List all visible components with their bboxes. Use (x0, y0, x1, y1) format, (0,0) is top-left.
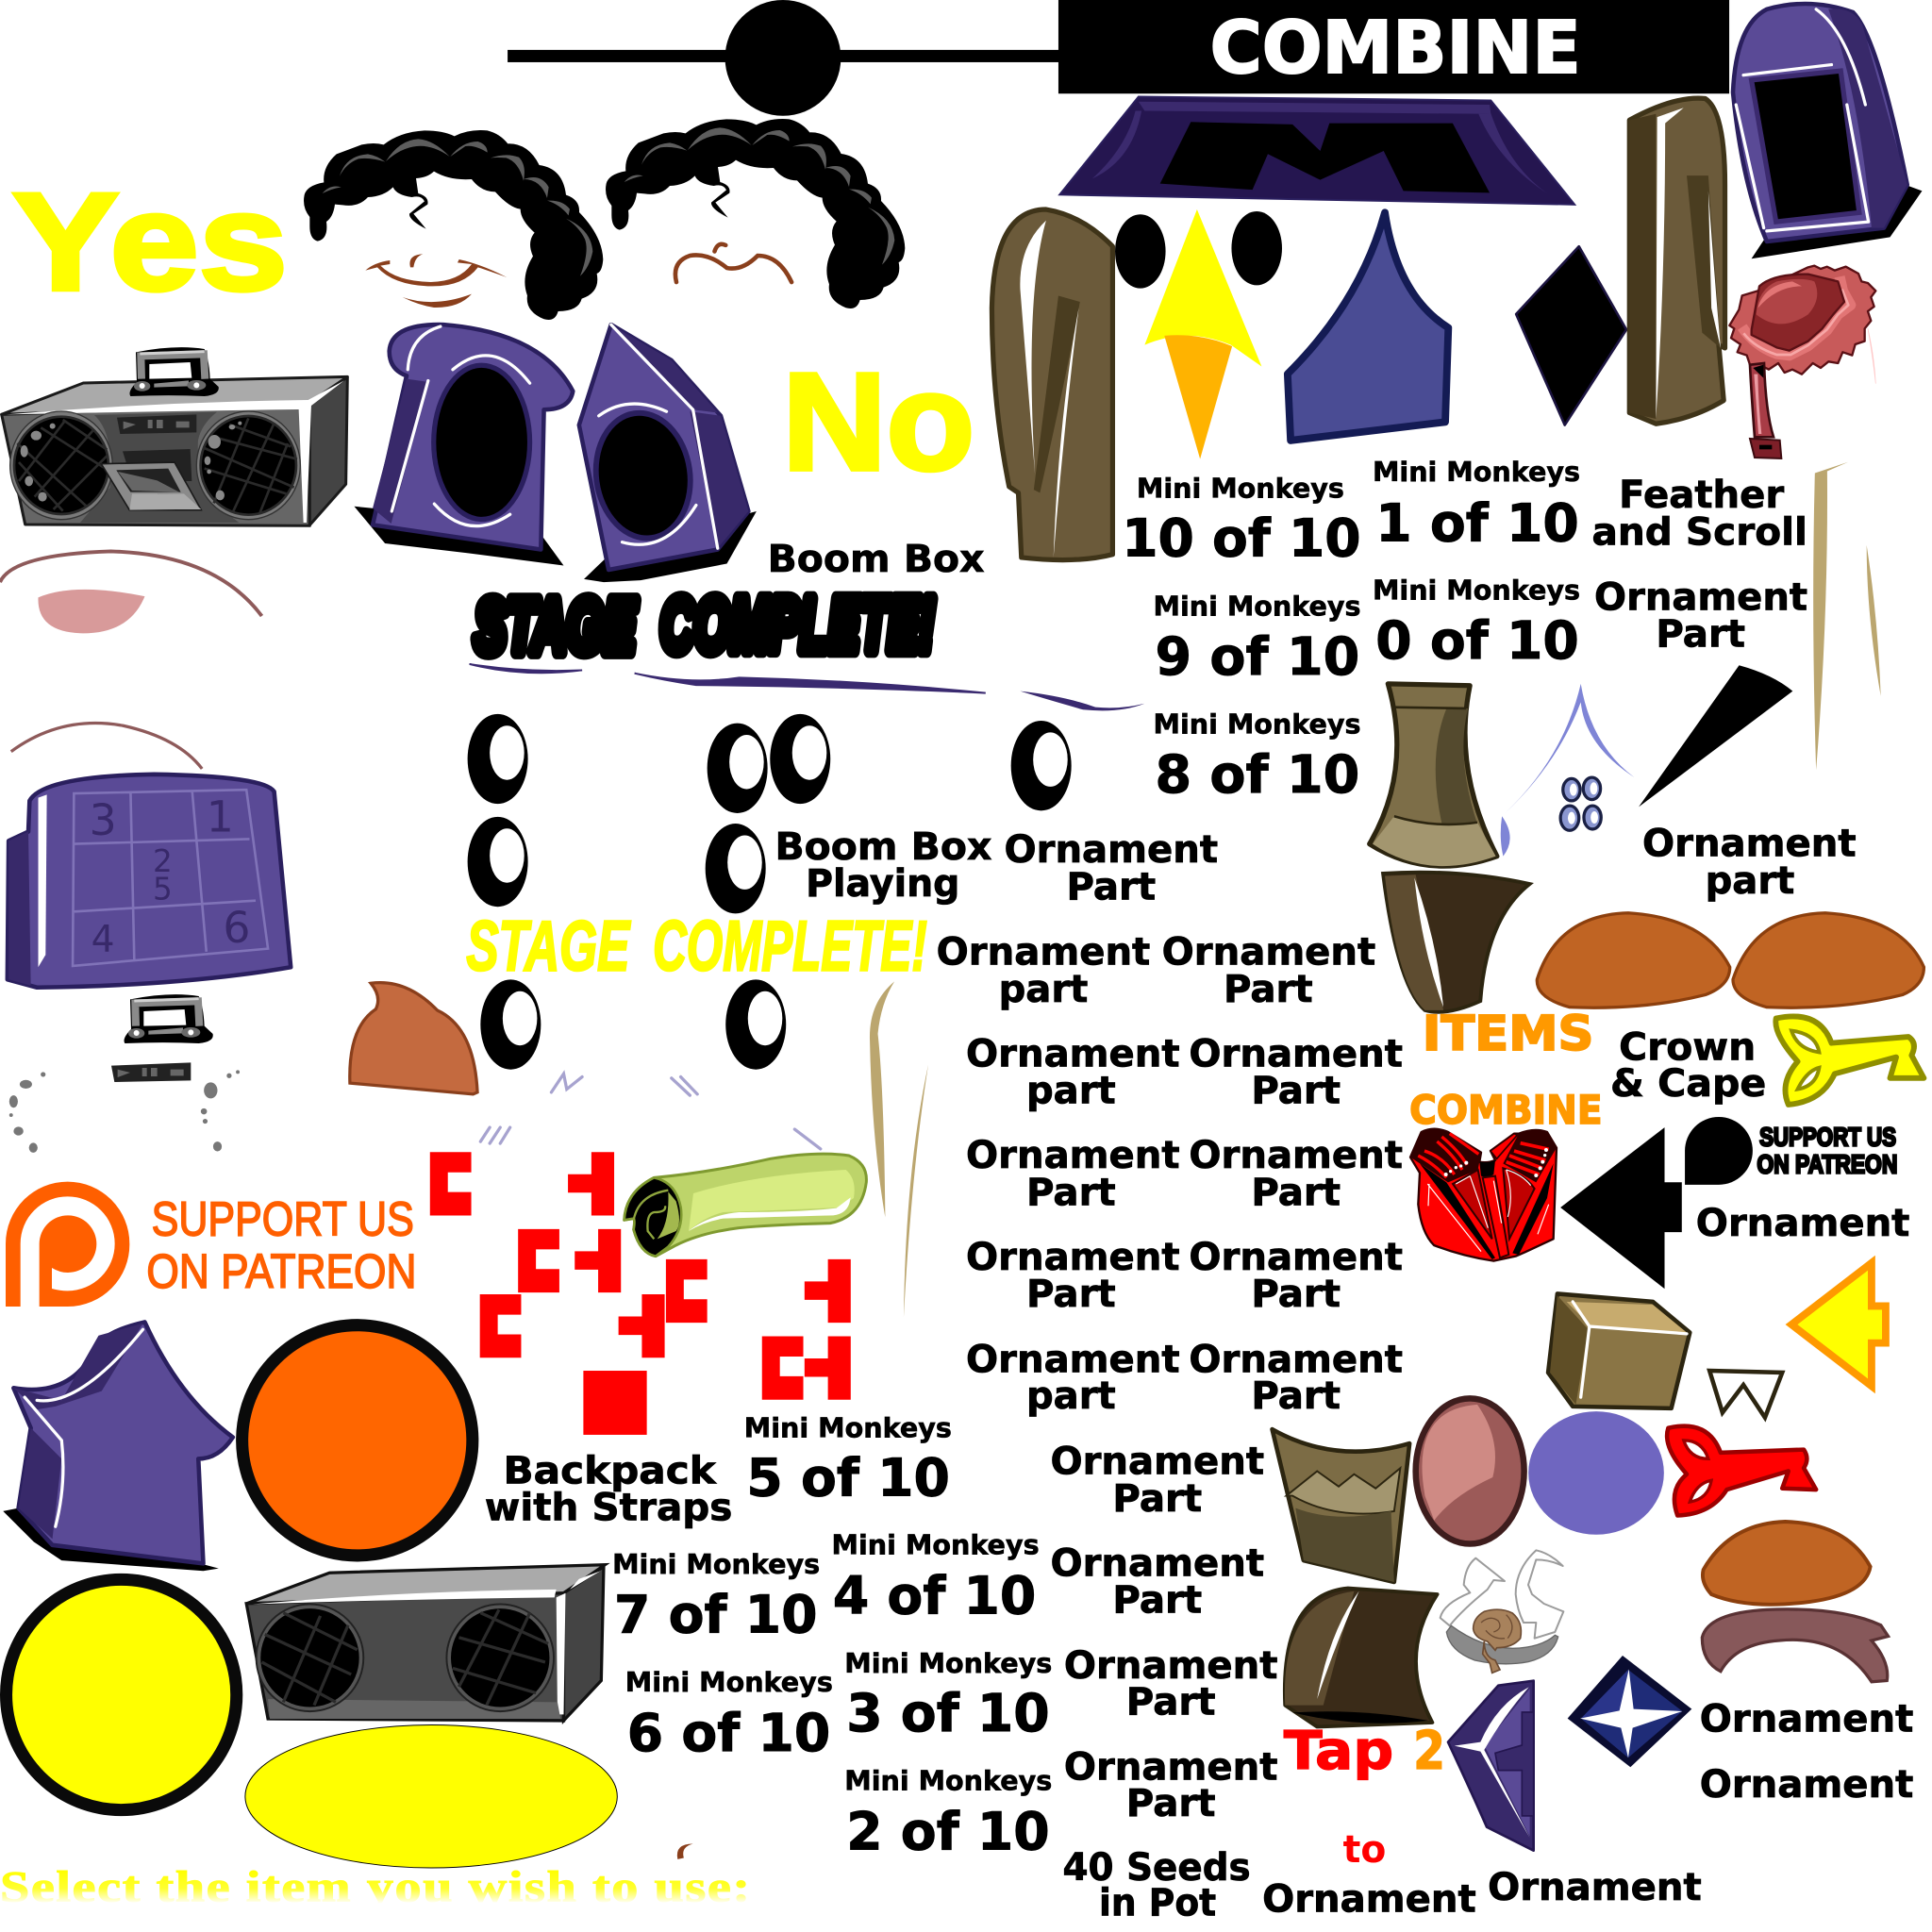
stage complete yellow title: COMPLETE! (653, 906, 927, 985)
ornament caption: Ornament (1696, 1200, 1909, 1245)
mini monkeys 0 of 10: 0 of 10 (1375, 610, 1579, 671)
mini monkeys 4 of 10: Mini Monkeys (832, 1530, 1040, 1561)
purple tablet: 5 (153, 871, 173, 907)
slider line with knob (508, 0, 1179, 116)
items heading: ITEMS (1423, 1007, 1593, 1062)
blue beads (1560, 777, 1601, 830)
quadrant: top-left sprites (0, 0, 1179, 988)
no label: No (782, 345, 974, 500)
w teeth (1709, 1371, 1782, 1418)
blue tent shape (1288, 212, 1448, 441)
ornament part row 4 (966, 1336, 1403, 1418)
dark brown cuff (1285, 1589, 1438, 1726)
eye (1011, 721, 1072, 810)
purple tablet: 4 (92, 919, 115, 961)
ornament part row 2 (966, 1132, 1403, 1214)
mini monkeys 8 of 10: Mini Monkeys (1154, 709, 1361, 741)
ornament part row 4: Ornament (966, 1336, 1180, 1381)
ornament part row 4: part (1026, 1373, 1116, 1418)
sad mouth (675, 244, 791, 282)
dark purple hood (1059, 97, 1574, 205)
feather hat with strap (1729, 266, 1875, 458)
ornament captions bottom: Ornament (1262, 1875, 1476, 1921)
mini monkeys 7 of 10: Mini Monkeys (612, 1549, 820, 1580)
combine orange heading: COMBINE (1409, 1087, 1603, 1133)
mini monkeys 9 of 10: Mini Monkeys (1154, 591, 1361, 622)
select item prompt: Select the item you wish to use: (0, 1862, 752, 1911)
ornament part row 3: Ornament (1189, 1234, 1403, 1279)
ornament part caption: Ornament (1642, 821, 1857, 866)
speaker left (354, 325, 573, 565)
stage complete yellow title: STAGE (466, 906, 631, 985)
orange circle (242, 1325, 473, 1556)
mini monkeys 4 of 10 (832, 1530, 1040, 1625)
pink egg (1416, 1398, 1524, 1544)
ornament part cup (1273, 1429, 1409, 1582)
ornament part caption: Ornament (1162, 929, 1375, 974)
mini monkeys 3 of 10: 3 of 10 (846, 1683, 1050, 1743)
patreon logo (6, 1182, 129, 1307)
purple swooshes (470, 664, 986, 693)
grey speaker dots (9, 1070, 240, 1153)
ornament part captions column: Ornament (1050, 1540, 1264, 1585)
ornament captions right (1700, 1696, 1913, 1807)
purple swoosh (1020, 691, 1144, 710)
ornament part captions column: Part (1112, 1475, 1202, 1521)
support us on patreon (146, 1191, 416, 1298)
eye (725, 979, 786, 1070)
mini monkeys 5 of 10: 5 of 10 (746, 1448, 950, 1508)
tan strips (870, 981, 928, 1317)
mini monkeys 10 of 10: Mini Monkeys (1137, 474, 1344, 505)
ornament part row 1: part (1026, 1068, 1116, 1113)
ornament captions bottom: Ornament (1488, 1864, 1702, 1909)
periwinkle scratches (480, 1074, 821, 1149)
backpack caption: with Straps (485, 1485, 732, 1530)
small control strip (111, 1062, 191, 1082)
ornament part caption (1162, 929, 1375, 1011)
support us on patreon: SUPPORT US (152, 1191, 414, 1245)
maroon arc (1702, 1609, 1889, 1682)
speaker right (579, 325, 757, 582)
ornament part caption (1004, 826, 1218, 908)
ornament part caption (1642, 821, 1857, 903)
eyes row (468, 714, 830, 913)
yellow circle (7, 1579, 237, 1810)
dark brown cuff (1383, 873, 1529, 1012)
mini monkeys 8 of 10: 8 of 10 (1155, 744, 1359, 805)
ornament part captions column: Part (1126, 1678, 1215, 1724)
yellow arrow cone (1144, 209, 1261, 458)
olive cloth left (991, 209, 1112, 560)
mini monkeys 7 of 10 (612, 1549, 820, 1645)
boom box caption: Boom Box (768, 536, 984, 581)
ornament part caption: Part (1656, 611, 1745, 657)
orange bun left (1537, 913, 1730, 1008)
ornament part captions column (1050, 1439, 1277, 1825)
backpack caption (485, 1448, 732, 1530)
ornament part captions column: Ornament (1050, 1439, 1264, 1484)
feather and scroll caption: and Scroll (1591, 508, 1807, 554)
purple tablet: 6 (223, 903, 250, 953)
purple tablet: 1 (207, 792, 234, 842)
ornament captions bottom (1262, 1864, 1702, 1921)
tap 2 to: to (1343, 1826, 1386, 1872)
mini monkeys 5 of 10 (744, 1413, 952, 1508)
mini monkeys 0 of 10: Mini Monkeys (1373, 575, 1580, 606)
tap 2 to (1284, 1721, 1445, 1872)
40 seeds caption (1063, 1844, 1251, 1924)
mini monkeys 1 of 10: 1 of 10 (1375, 492, 1579, 553)
stage complete black title: STAGE (475, 584, 638, 668)
ornament captions right: Ornament (1700, 1696, 1913, 1741)
eye (480, 979, 541, 1070)
mini monkeys 9 of 10 (1154, 591, 1361, 687)
mini monkeys 3 of 10: Mini Monkeys (844, 1648, 1052, 1679)
mini monkeys 5 of 10: Mini Monkeys (744, 1413, 952, 1444)
ornament part row 3: Ornament (966, 1234, 1180, 1279)
mini monkeys 10 of 10: 10 of 10 (1122, 508, 1361, 569)
ornament part caption (937, 929, 1150, 1011)
crown and cape caption (1610, 1024, 1766, 1106)
happy face (365, 254, 507, 308)
ornament captions right: Ornament (1700, 1761, 1913, 1807)
arc (11, 724, 202, 769)
ornament part captions column: Part (1126, 1780, 1215, 1825)
stage complete yellow title (466, 906, 927, 985)
backpack caption: Backpack (504, 1448, 717, 1493)
ornament part row 3: Part (1251, 1271, 1341, 1316)
purple gem (1448, 1681, 1534, 1851)
star diamond (1568, 1656, 1691, 1767)
small brown hook (677, 1844, 693, 1859)
ornament part caption: Part (1224, 966, 1313, 1011)
ornament part row 1: Part (1251, 1068, 1341, 1113)
boom box playing caption (774, 824, 991, 906)
mouth arc and tongue (0, 551, 262, 633)
black spike (1639, 665, 1792, 807)
sad hair (606, 119, 905, 308)
yellow arrow (1791, 1263, 1886, 1386)
crown and cape caption: Crown (1619, 1024, 1756, 1069)
red pixel brackets (430, 1152, 851, 1435)
red key (1667, 1426, 1816, 1515)
orange bun (1703, 1522, 1871, 1605)
support us on patreon: ON PATREON (146, 1244, 416, 1298)
happy hair (304, 130, 603, 320)
mini monkeys 0 of 10 (1373, 575, 1580, 671)
ornament part row 1: Ornament (1189, 1030, 1403, 1075)
ornament part row 1 (966, 1030, 1403, 1113)
tap 2 to: 2 (1413, 1721, 1445, 1782)
feather and scroll caption (1591, 472, 1807, 554)
small support us black text (1757, 1123, 1897, 1178)
mini monkeys 8 of 10 (1154, 709, 1361, 805)
ornament part captions column: Ornament (1064, 1642, 1277, 1688)
olive cloth right (1629, 98, 1724, 424)
mini monkeys 3 of 10 (844, 1648, 1052, 1743)
mini monkeys 2 of 10: 2 of 10 (846, 1801, 1050, 1861)
seeds in pot (1441, 1550, 1563, 1673)
mini monkeys 9 of 10: 9 of 10 (1155, 626, 1359, 687)
black patreon mark (1685, 1117, 1753, 1185)
small support us black text: SUPPORT US (1759, 1123, 1896, 1152)
black arrow (1560, 1127, 1682, 1289)
ornament part row 1: Ornament (966, 1030, 1180, 1075)
40 seeds caption: 40 Seeds (1063, 1844, 1251, 1890)
purple tablet: 3 (90, 795, 117, 845)
crown and cape caption: & Cape (1610, 1060, 1766, 1106)
mini monkeys 1 of 10 (1373, 457, 1580, 553)
purple tablet (8, 774, 291, 988)
purple tablet: 2 (153, 843, 173, 879)
mini monkeys 7 of 10: 7 of 10 (614, 1585, 818, 1645)
black oval right (1231, 211, 1282, 285)
small support us black text: ON PATREON (1757, 1149, 1897, 1178)
brown blob (350, 983, 477, 1094)
tap 2 to: Tap (1284, 1721, 1393, 1782)
periwinkle circle (1528, 1411, 1664, 1535)
ornament part row 2: Part (1251, 1169, 1341, 1214)
ornament part caption: Ornament (1004, 826, 1218, 872)
ornament part row 4: Part (1251, 1373, 1341, 1418)
quadrant: bottom-left sprites (0, 979, 1052, 1911)
mini monkeys 6 of 10: 6 of 10 (627, 1703, 830, 1763)
purple helmet (1733, 4, 1922, 258)
combine banner: COMBINE (1210, 6, 1581, 91)
feather and scroll caption: Feather (1619, 472, 1784, 517)
orange bun right (1733, 913, 1924, 1008)
ornament part caption: Ornament (1594, 574, 1807, 619)
red vest (1410, 1129, 1557, 1261)
ornament part row 3 (966, 1234, 1403, 1316)
ornament part caption (1594, 574, 1807, 657)
quadrant: top-right sprites (937, 0, 1924, 1012)
mini monkeys 10 of 10 (1122, 474, 1361, 569)
small boom box handle (124, 994, 213, 1043)
ornament part caption: Ornament (937, 929, 1150, 974)
green scroll (625, 1154, 866, 1257)
ornament part captions column: Part (1112, 1577, 1202, 1623)
black diamond (1516, 246, 1626, 425)
speaker box (246, 1565, 605, 1721)
quadrant: bottom-right sprites (966, 1007, 1924, 1924)
periwinkle arch (1501, 684, 1635, 857)
tan strips (1813, 462, 1881, 770)
mini monkeys 2 of 10: Mini Monkeys (844, 1766, 1052, 1797)
ornament part caption: part (999, 966, 1088, 1011)
ornament part row 3: Part (1026, 1271, 1116, 1316)
ornament part caption: Part (1066, 863, 1156, 908)
tan urn (1370, 684, 1497, 866)
black oval left (1115, 214, 1166, 289)
mini monkeys 6 of 10: Mini Monkeys (625, 1667, 833, 1698)
mini monkeys 1 of 10: Mini Monkeys (1373, 457, 1580, 488)
ornament part row 2: Part (1026, 1169, 1116, 1214)
brown box (1548, 1293, 1690, 1408)
mini monkeys 2 of 10 (844, 1766, 1052, 1861)
yes label: Yes (12, 165, 288, 320)
ornament part captions column: Ornament (1064, 1744, 1277, 1790)
ornament part row 2: Ornament (1189, 1132, 1403, 1177)
boom box (2, 347, 347, 525)
mini monkeys 4 of 10: 4 of 10 (833, 1565, 1036, 1625)
ornament part row 4: Ornament (1189, 1336, 1403, 1381)
boom box playing caption: Playing (806, 860, 959, 906)
40 seeds caption: in Pot (1099, 1879, 1216, 1924)
boom box playing caption: Boom Box (774, 824, 991, 869)
purple shirt (3, 1322, 233, 1571)
combine banner (1058, 0, 1729, 93)
stage complete black title: COMPLETE! (660, 583, 935, 667)
yellow key (1775, 1016, 1924, 1105)
yellow ellipse (245, 1724, 617, 1868)
stage complete black title (475, 583, 935, 668)
ornament part caption: part (1706, 858, 1794, 903)
mini monkeys 6 of 10 (625, 1667, 833, 1763)
ornament part row 2: Ornament (966, 1132, 1180, 1177)
